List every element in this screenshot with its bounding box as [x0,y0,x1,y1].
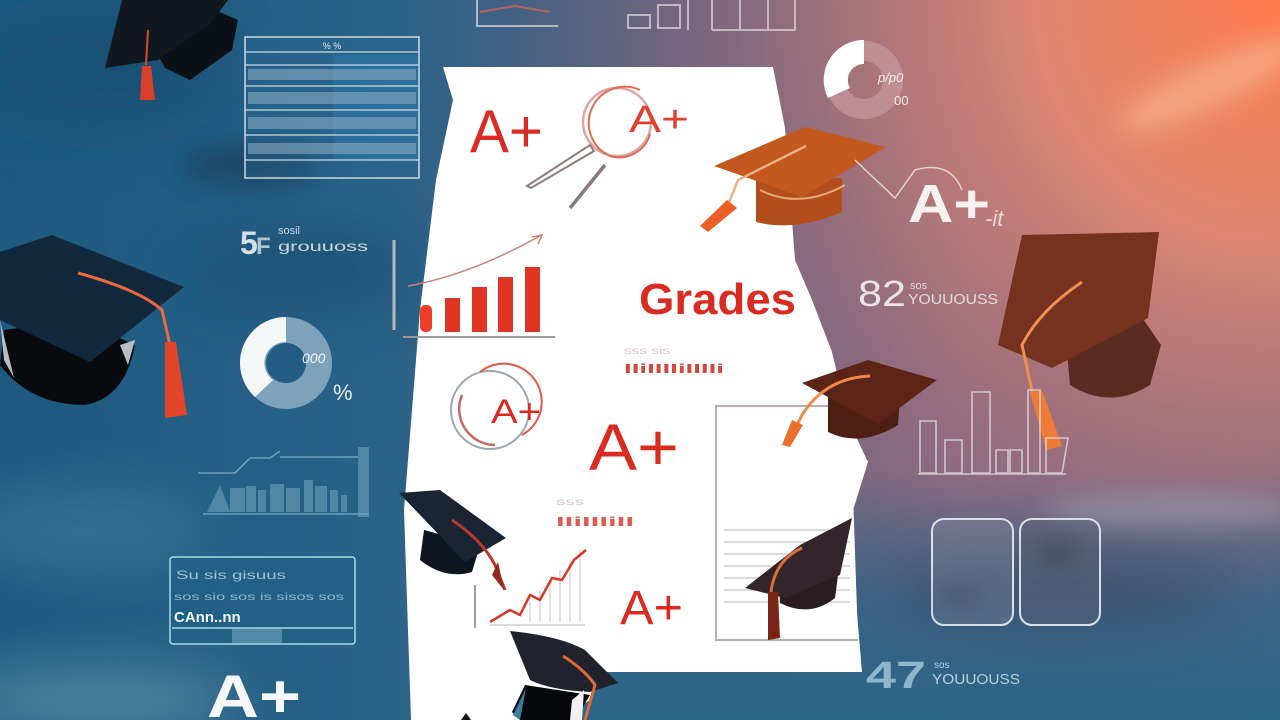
left donut chart: 000 [302,350,326,366]
bottom-right stat: YOUUOUSS [932,671,1020,688]
left text panel: CAnn..nn [174,609,241,626]
paper sheet [404,67,868,720]
left big cap [0,235,187,418]
small red text block 1: IIiIIIIiIIIIi [624,361,724,376]
red A+ top left: A+ [470,98,543,165]
left donut chart: % [333,380,353,405]
left stat [240,225,368,261]
right stat: sos [910,280,928,292]
small red text block 2: sss [556,497,584,508]
red bar chart [394,235,555,337]
lower left dark cap [399,490,506,590]
small red text block 2: IIiIIIiII [556,514,634,529]
white A+ with arc: A+ [908,174,990,234]
bottom-right stat: 47 [866,655,926,697]
top donut chart [824,40,908,109]
centre dark brown cap [782,360,937,447]
left stat: grouuoss [278,238,368,254]
red A+ centre: A+ [589,410,679,484]
small red text block 2 [556,497,634,529]
circle with A+: A+ [491,393,541,431]
top chart fragments [477,0,795,30]
bottom-right stat [866,655,1020,697]
data table panel [245,37,419,178]
bottom dark cap [461,631,618,720]
right stat: 82 [858,273,906,314]
right document [716,406,858,640]
right stat: YOUUOUSS [908,291,998,308]
left text panel: Su sis gisuus [176,568,286,582]
right stat [858,273,998,314]
data table panel: % % [323,41,341,51]
left stat: sosil [278,225,300,237]
magnifier with A+: A+ [629,99,689,141]
left stat: F [256,233,271,260]
right big cap [998,232,1161,450]
right outline bar chart [918,390,1068,474]
red line chart [475,550,586,628]
bottom-right stat: sos [934,660,950,671]
small red text block 1 [624,346,724,376]
centre brown cap [700,127,886,232]
heading: Grades: Grades [639,275,796,324]
top-left cap [105,0,238,100]
red A+ lower: A+ [620,582,683,635]
magnifier with A+ [527,87,689,208]
left text panel [170,557,355,644]
left text panel: sos sio sos is sisos sos [174,592,344,603]
white A+ with arc: -it [985,206,1004,231]
left bar chart [198,447,369,517]
left donut chart [240,317,353,405]
small red text block 1: sss sis [624,346,670,357]
top donut chart: 00 [894,93,908,108]
top donut chart: p/p0 [877,70,904,85]
white A+ with arc [855,160,1004,234]
lower right dark cap [745,518,852,640]
left stat: 5 [240,225,258,261]
right rounded panels [932,519,1100,625]
circle with A+ [451,364,542,449]
